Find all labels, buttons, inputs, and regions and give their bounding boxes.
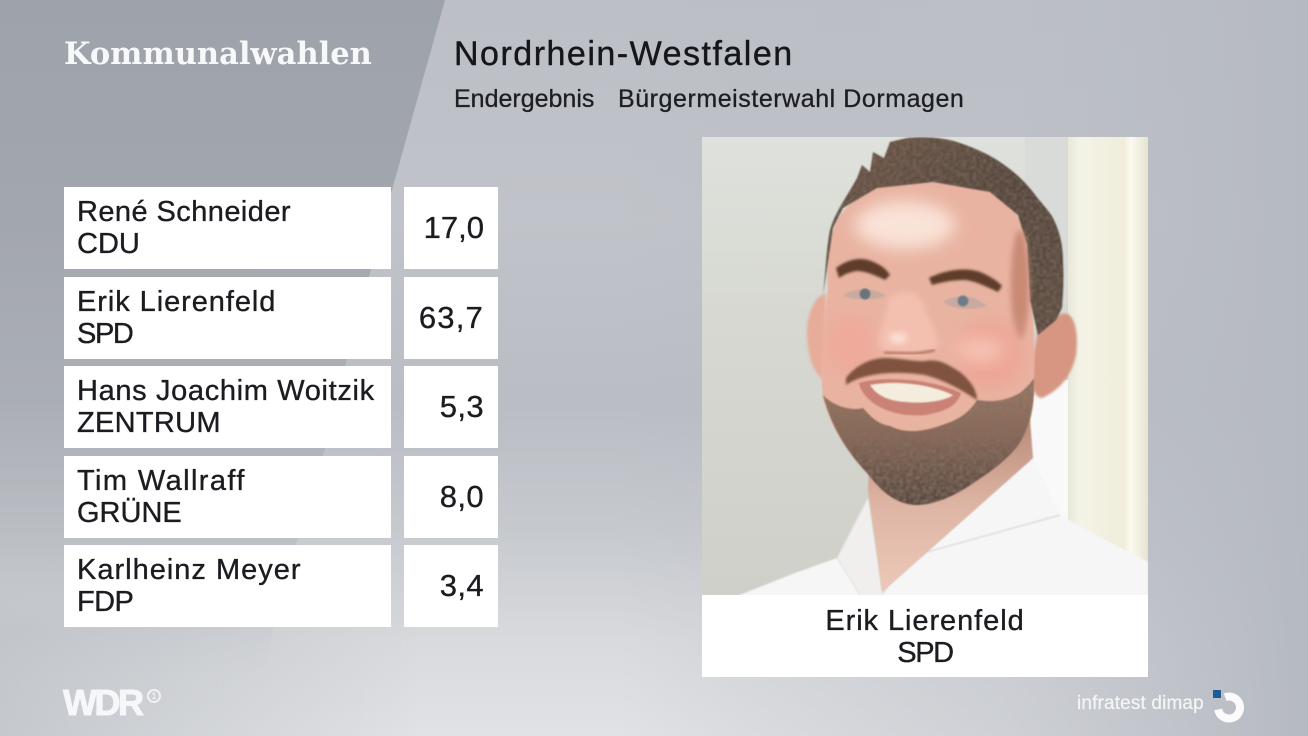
row: Karlheinz Meyer: FDP: [77, 586, 133, 618]
logo: infratest dimap: [1077, 690, 1244, 722]
forehead highlight: [855, 201, 955, 249]
row: René Schneider: CDU: [77, 228, 140, 260]
row: René Schneider: [64, 187, 498, 269]
hair: [820, 135, 1070, 340]
door post: [1068, 137, 1148, 595]
row: Hans Joachim Woitzik: Hans Joachim Woitzik: [77, 375, 375, 407]
row: Karlheinz Meyer: 3,4: [440, 568, 484, 603]
portrait photo: [702, 137, 1148, 595]
row: Tim Wallraff: GRÜNE: [77, 497, 182, 529]
row: René Schneider: 17,0: [424, 210, 484, 245]
row: René Schneider: René Schneider: [77, 196, 291, 228]
portrait caption: SPD: [897, 637, 953, 669]
heading: Kommunalwahlen: Kommunalwahlen: [64, 36, 372, 72]
mustache: [846, 358, 977, 400]
temple shade: [1011, 230, 1029, 340]
beard: [822, 378, 1035, 506]
logo: WDR: WDR: [63, 682, 141, 723]
eyes: [843, 288, 987, 309]
eyebrows: [836, 259, 1002, 292]
row: Erik Lierenfeld: 63,7: [419, 300, 484, 335]
shirt: [737, 458, 1148, 596]
row: Karlheinz Meyer: Karlheinz Meyer: [77, 554, 302, 586]
mouth: [859, 379, 961, 415]
portrait caption: [702, 595, 1148, 677]
nose: [878, 292, 938, 355]
row: Hans Joachim Woitzik: 5,3: [440, 389, 484, 424]
ears: [807, 294, 1077, 398]
row: Erik Lierenfeld: SPD: [77, 318, 132, 350]
portrait caption: Erik Lierenfeld: [825, 605, 1025, 637]
subheading: [454, 85, 964, 113]
logo: infratest dimap: infratest dimap: [1077, 693, 1204, 714]
subheading: Endergebnis: [454, 85, 594, 113]
row: Hans Joachim Woitzik: [64, 366, 498, 448]
teeth: [870, 383, 953, 403]
subheading: Bürgermeisterwahl Dormagen: [618, 85, 964, 113]
row: Hans Joachim Woitzik: ZENTRUM: [77, 407, 221, 439]
results table: [64, 187, 498, 627]
icon: infratest mark: [1213, 690, 1244, 722]
wall: [702, 137, 1148, 595]
row: Erik Lierenfeld: [64, 277, 498, 359]
cheek highlights: [824, 315, 876, 375]
row: Tim Wallraff: 8,0: [440, 479, 484, 514]
row: Tim Wallraff: [64, 456, 498, 538]
row: Tim Wallraff: Tim Wallraff: [77, 465, 246, 497]
row: Erik Lierenfeld: Erik Lierenfeld: [77, 286, 276, 318]
heading: Nordrhein-Westfalen: Nordrhein-Westfalen: [454, 35, 794, 73]
icon: ARD one: 1: [151, 691, 156, 701]
face: [822, 182, 1034, 505]
row: Karlheinz Meyer: [64, 545, 498, 627]
icon: ARD one: [147, 689, 161, 703]
neck: [868, 420, 1033, 592]
